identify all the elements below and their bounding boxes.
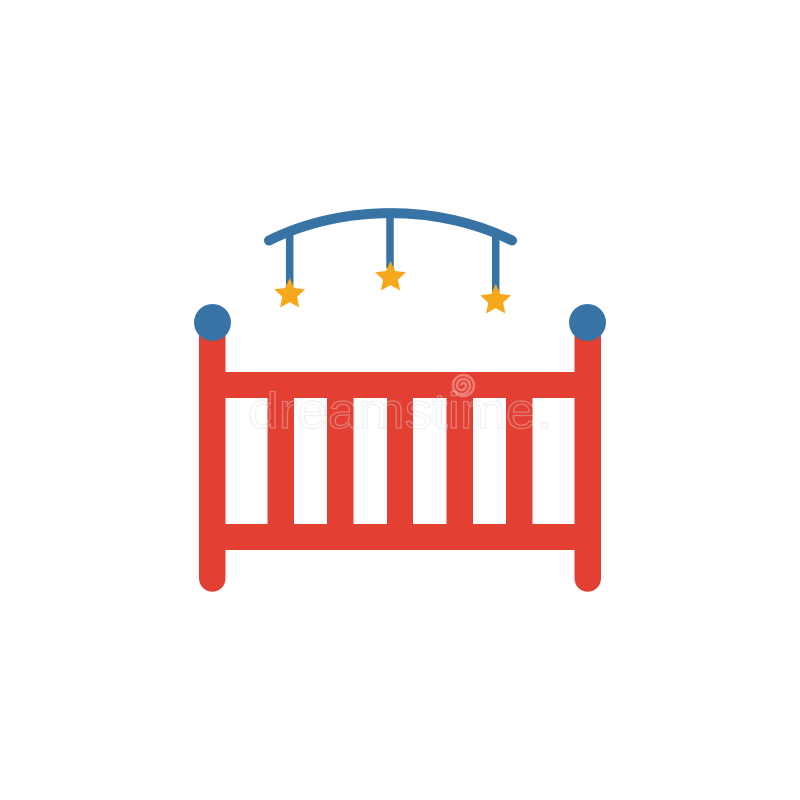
slats — [268, 398, 532, 524]
middle hanger — [386, 214, 394, 268]
right post — [574, 330, 601, 592]
right hanger — [492, 234, 499, 292]
mobile arc — [269, 213, 512, 240]
left hanger — [286, 234, 293, 286]
top rail — [199, 372, 601, 398]
right star — [480, 284, 511, 313]
middle star — [375, 261, 406, 290]
watermark text: dreamstime. — [248, 383, 552, 439]
stars — [274, 261, 511, 313]
right knob — [569, 304, 606, 341]
watermark spiral — [453, 375, 474, 396]
bottom rail — [199, 524, 601, 550]
left post — [199, 330, 226, 592]
left star — [274, 278, 305, 307]
left knob — [194, 304, 231, 341]
mobile: arm and hangers — [269, 213, 512, 292]
crib frame — [199, 330, 601, 592]
watermark — [248, 375, 552, 439]
